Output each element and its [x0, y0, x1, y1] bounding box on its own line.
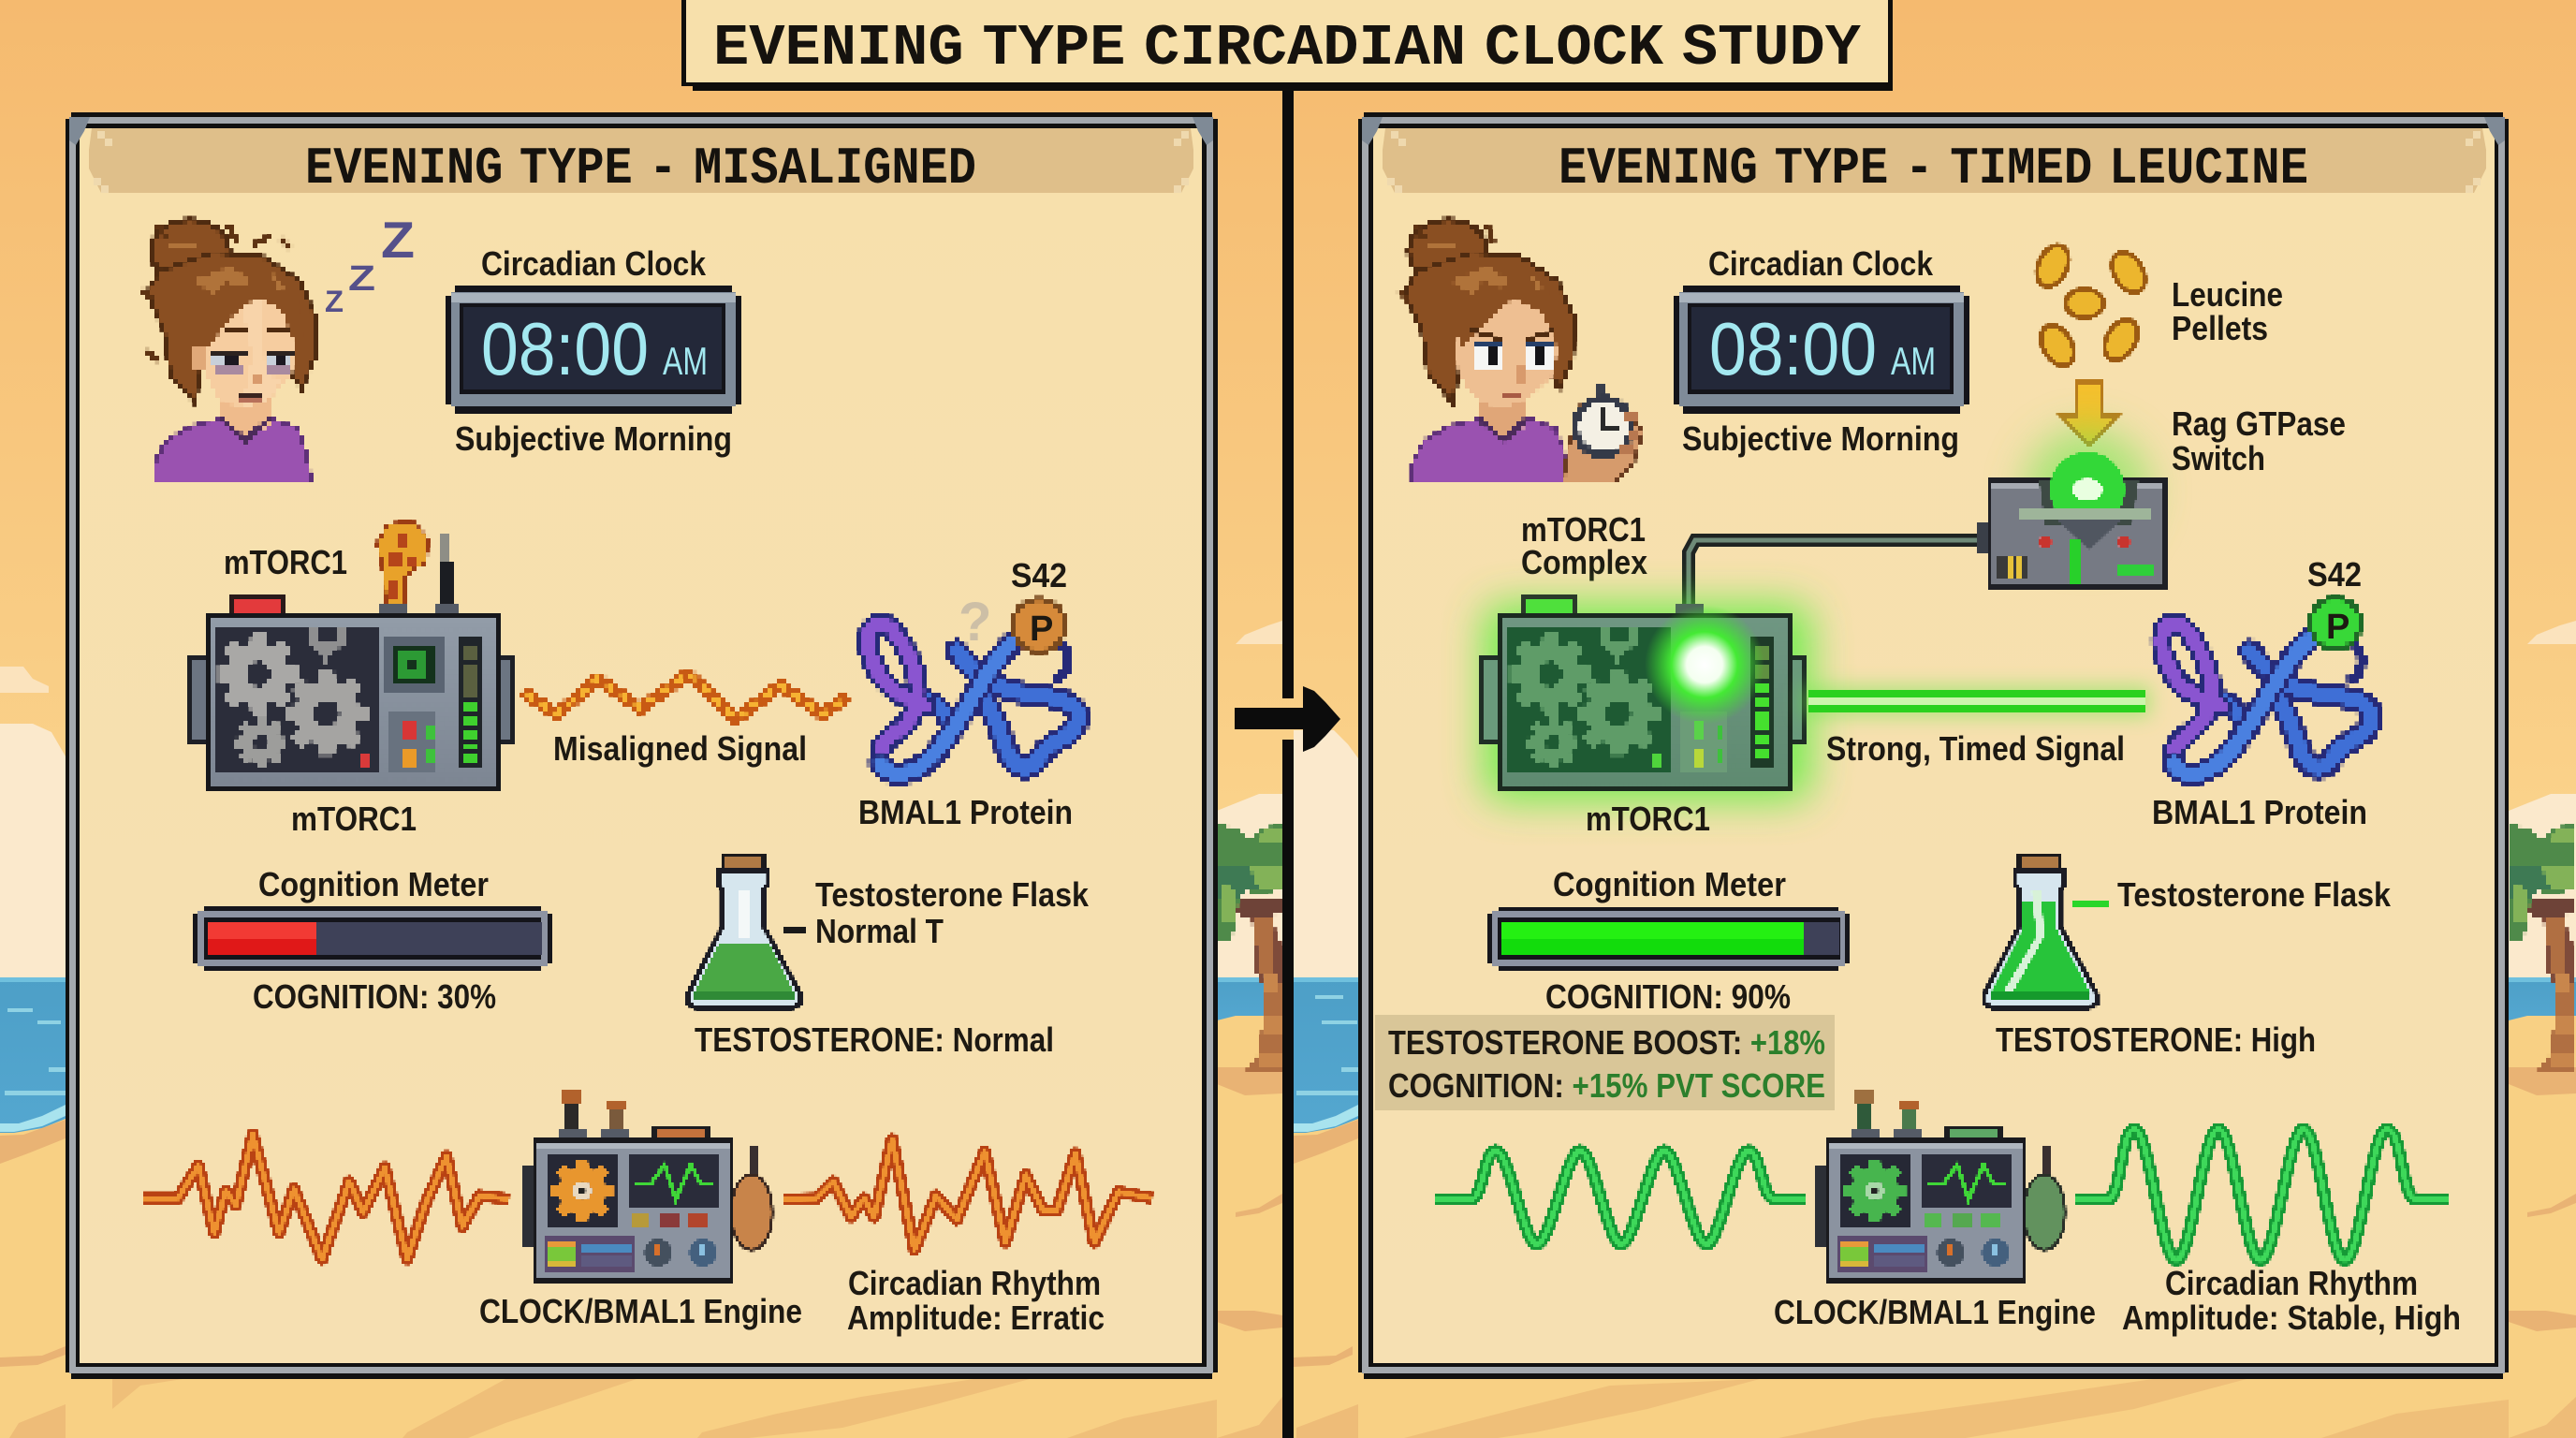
circadian clock label: Circadian Clock — [481, 244, 707, 283]
signal wire — [1689, 540, 1980, 606]
active mtorc1 machine — [1479, 596, 1808, 793]
clock digits: 08:00 — [481, 307, 649, 390]
panel heading band — [89, 128, 1193, 198]
alert woman with stopwatch — [1399, 220, 1643, 482]
mtorc1 bottom label: mTORC1 — [1586, 800, 1710, 838]
strong signal beam — [1808, 690, 2145, 712]
cognition meter label: Cognition Meter — [258, 865, 489, 903]
cognition pvt line: COGNITION: +15% PVT SCORE — [1388, 1066, 1825, 1105]
cognition value: COGNITION: 30% — [253, 977, 496, 1016]
cognition meter bar 90 percent — [1487, 907, 1850, 971]
title text: EVENING TYPE CIRCADIAN CLOCK STUDY — [713, 15, 1862, 81]
bmal1 protein ribbon — [868, 599, 1078, 773]
strong signal label: Strong, Timed Signal — [1826, 729, 2125, 768]
flask connector dash — [783, 927, 806, 933]
clock bmal1 engine — [522, 1091, 772, 1283]
bmal1 protein label: BMAL1 Protein — [2152, 793, 2367, 831]
panel heading text: EVENING TYPE - TIMED LEUCINE — [1559, 139, 2308, 198]
bmal1 protein label: BMAL1 Protein — [858, 793, 1073, 831]
circadian rhythm label: Circadian Rhythm — [848, 1264, 1101, 1302]
engine label: CLOCK/BMAL1 Engine — [1774, 1293, 2096, 1331]
mtorc1 top label: mTORC1 — [224, 543, 347, 581]
clock meridiem: AM — [1891, 339, 1936, 383]
panel: evening type timed leucine — [1358, 112, 2509, 1379]
subjective morning label: Subjective Morning — [1682, 419, 1959, 458]
palm tree between panels — [1218, 822, 1284, 1073]
complex label: Complex — [1521, 543, 1647, 581]
bmal1 protein ribbon — [2161, 598, 2372, 773]
erratic wave right — [783, 1139, 1152, 1250]
cognition meter bar 30 percent — [193, 906, 552, 971]
testosterone value: TESTOSTERONE: High — [1996, 1020, 2316, 1059]
panel: evening type misaligned — [66, 112, 1218, 1379]
amplitude stable label: Amplitude: Stable, High — [2122, 1299, 2461, 1337]
signal beam glow — [1802, 685, 2150, 717]
circadian rhythm label: Circadian Rhythm — [2165, 1264, 2418, 1302]
center divider line — [1282, 91, 1294, 1438]
misaligned signal wave — [527, 674, 843, 719]
digital clock — [1674, 286, 1969, 414]
testosterone flask label: Testosterone Flask — [815, 875, 1090, 914]
testosterone flask high — [1984, 855, 2097, 1008]
s42 label: S42 — [2307, 555, 2362, 594]
subjective morning label: Subjective Morning — [455, 419, 732, 458]
sleep z letters: Z — [381, 211, 415, 269]
sleep z letters: Z — [325, 285, 344, 318]
mtorc1 machine — [187, 521, 517, 793]
leucine label: Leucine — [2172, 275, 2283, 314]
panel heading text: EVENING TYPE - MISALIGNED — [305, 139, 976, 198]
mtorc1 green glow — [1484, 604, 1811, 800]
rag gtpase label: Rag GTPase — [2172, 404, 2346, 443]
machine core glow — [1645, 605, 1764, 725]
sleep z letters — [325, 211, 415, 318]
circadian clock label: Circadian Clock — [1708, 244, 1934, 283]
panel heading band — [1383, 128, 2486, 198]
clock meridiem: AM — [663, 339, 708, 383]
yellow arrow down — [2061, 382, 2117, 445]
arrow: misaligned to timed leucine — [1235, 686, 1340, 752]
results callout — [1375, 1015, 1835, 1110]
mtorc1 bottom label: mTORC1 — [291, 800, 417, 838]
s42 label: S42 — [1011, 556, 1067, 594]
cognition meter label: Cognition Meter — [1553, 865, 1786, 903]
normal t label: Normal T — [815, 912, 944, 950]
cognition value: COGNITION: 90% — [1545, 977, 1791, 1016]
question mark: ? — [959, 592, 991, 653]
pellets label: Pellets — [2172, 309, 2268, 347]
leucine pellets — [2031, 241, 2151, 371]
sleepy woman — [140, 220, 316, 482]
amplitude erratic label: Amplitude: Erratic — [847, 1299, 1105, 1337]
digital clock — [446, 286, 741, 414]
erratic wave left — [143, 1135, 509, 1259]
stable wave right — [2075, 1129, 2450, 1260]
palm tree at right edge — [2510, 822, 2576, 1073]
title banner — [681, 0, 1893, 91]
stable wave left — [1435, 1151, 1805, 1244]
rag gtpase switch device — [1976, 452, 2167, 590]
clock digits: 08:00 — [1709, 307, 1877, 390]
clock bmal1 engine green — [1815, 1091, 2065, 1283]
mtorc1 label: mTORC1 — [1521, 510, 1646, 549]
phosphate label: P — [1030, 609, 1053, 649]
testosterone flask label: Testosterone Flask — [2117, 875, 2392, 914]
switch green glow — [2026, 430, 2149, 553]
testosterone boost line: TESTOSTERONE BOOST: +18% — [1388, 1023, 1825, 1062]
green flask connector — [2072, 901, 2109, 907]
switch label: Switch — [2172, 439, 2265, 477]
phosphate label: P — [2326, 608, 2349, 647]
testosterone value: TESTOSTERONE: Normal — [695, 1020, 1054, 1059]
testosterone flask — [688, 855, 800, 1008]
sleep z letters: Z — [348, 259, 375, 299]
engine label: CLOCK/BMAL1 Engine — [479, 1292, 802, 1330]
misaligned signal label: Misaligned Signal — [553, 729, 807, 768]
